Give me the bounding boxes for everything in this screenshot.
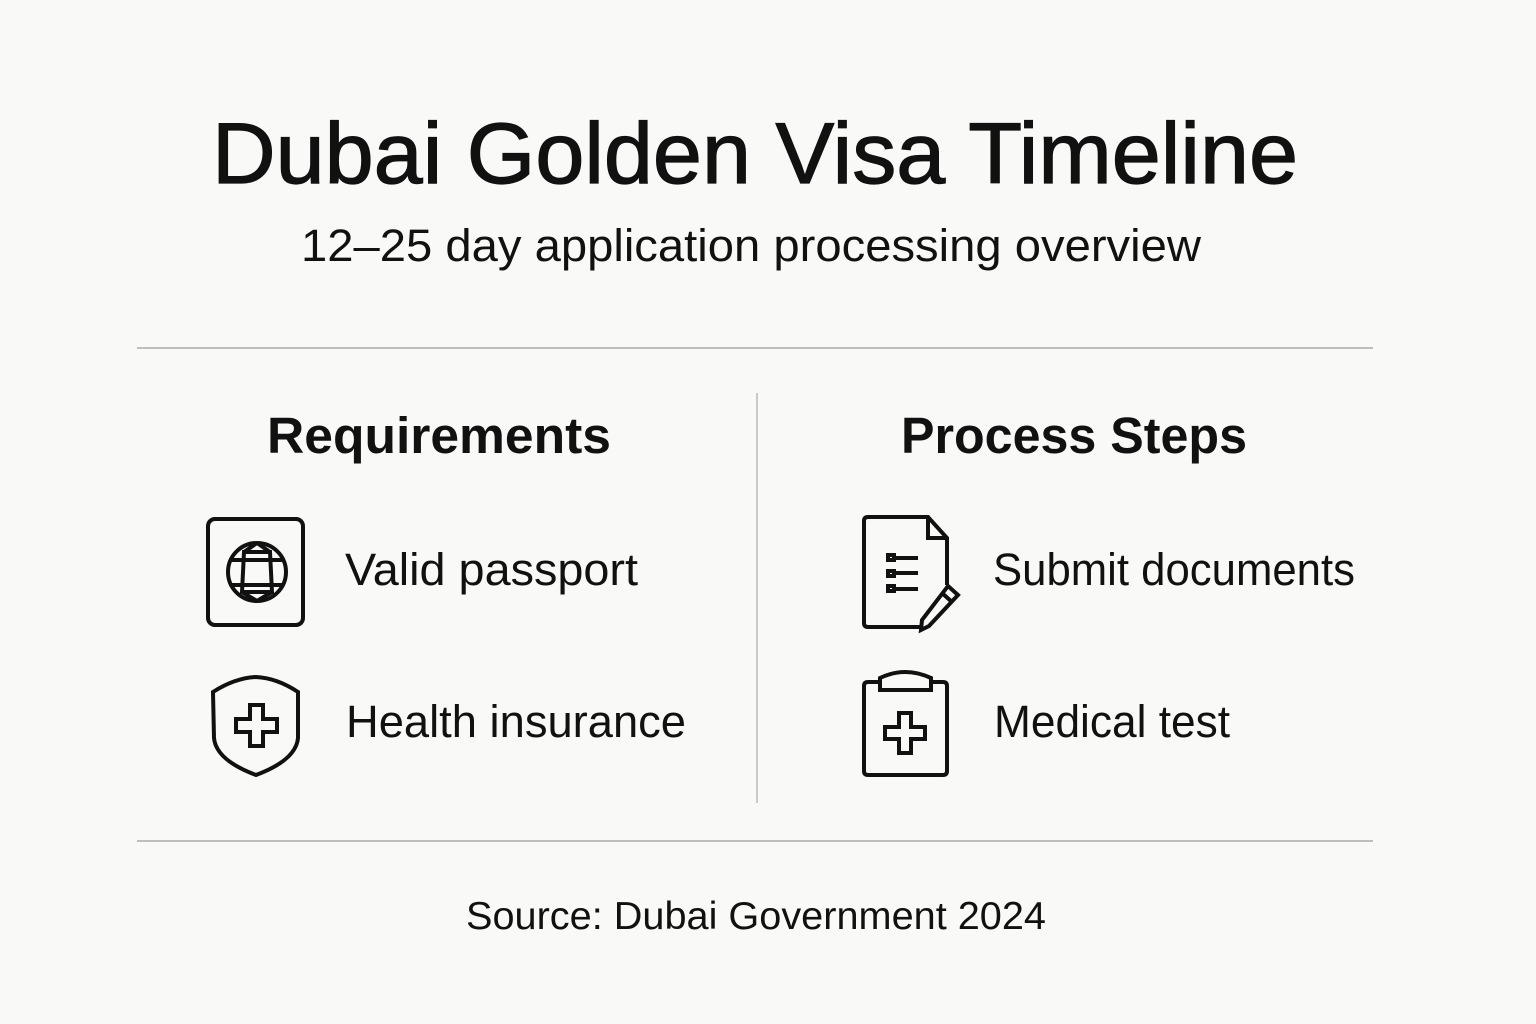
panel: process steps xyxy=(864,407,1355,775)
text: submit documents: Submit documents xyxy=(993,544,1355,595)
panel: requirements xyxy=(208,407,686,775)
heading: requirements: Requirements xyxy=(267,407,611,464)
text: health insurance: Health insurance xyxy=(346,696,686,747)
text: medical test: Medical test xyxy=(994,696,1230,747)
icon: medical clipboard xyxy=(864,672,947,775)
subtitle: 12–25 day application processing overview xyxy=(301,220,1202,271)
source note: Source: Dubai Government 2024 xyxy=(466,895,1046,938)
text: valid passport: Valid passport xyxy=(345,544,639,595)
heading: process steps: Process Steps xyxy=(901,407,1247,464)
title: Dubai Golden Visa Timeline xyxy=(212,106,1298,202)
icon: health shield xyxy=(213,677,298,775)
icon: passport xyxy=(208,519,303,625)
icon: document with pen xyxy=(864,517,958,630)
